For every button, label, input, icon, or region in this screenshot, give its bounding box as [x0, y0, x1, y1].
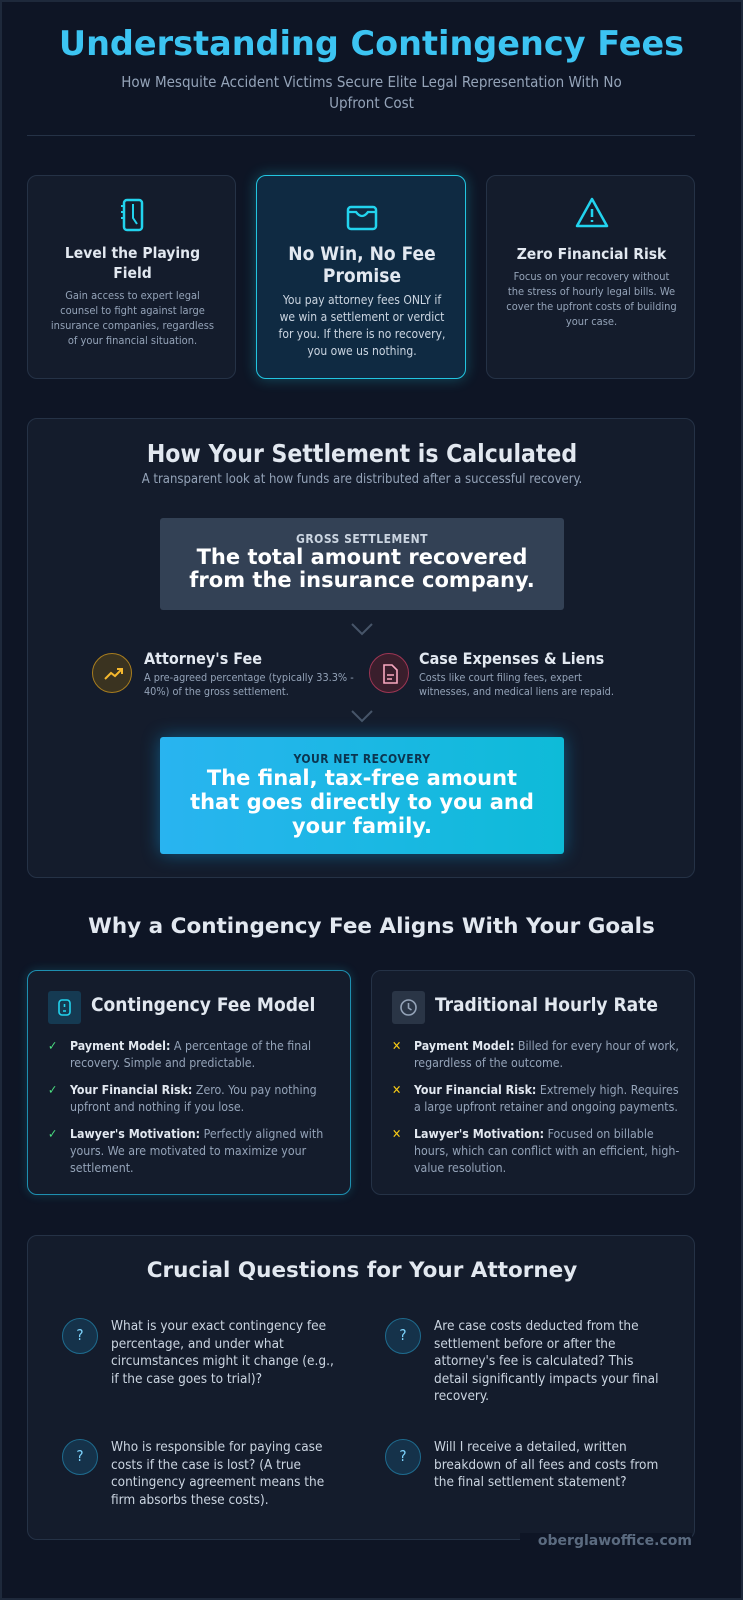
card: no win no fee [256, 175, 466, 379]
net recovery box: that goes directly to you and [190, 790, 534, 814]
card: level the playing field: Gain access to expert legal counsel to fight against large insurance companies, regardless of your financial situation. [51, 289, 214, 347]
item: case expenses: Costs like court filing fees, expert witnesses, and medical liens are repaid. [419, 671, 614, 698]
question 2: Are case costs deducted from the settlement before or after the attorney's fee is calculated? This detail significantly impacts your final recovery. [434, 1318, 658, 1404]
list [48, 1039, 323, 1175]
card: no win no fee: No Win, No Fee [288, 243, 436, 265]
net recovery box: The final, tax-free amount [207, 766, 517, 790]
list: Payment Model: A percentage of the final recovery. Simple and predictable. [70, 1039, 311, 1070]
list: Lawyer's Motivation: Perfectly aligned with yours. We are motivated to maximize your settlement. [70, 1127, 323, 1175]
panel: questions [27, 1235, 695, 1540]
item: case expenses [369, 649, 614, 698]
heading: why: Why a Contingency Fee Aligns With Your Goals [88, 914, 655, 939]
item: attorney fee [92, 649, 354, 698]
card: level the playing field: Level the Playing [65, 244, 200, 262]
gross settlement box: The total amount recovered [197, 545, 527, 569]
panel: contingency model: Contingency Fee Model [91, 994, 315, 1016]
panel: settlement [27, 418, 695, 878]
net recovery box [160, 737, 564, 854]
list: ✕ [392, 1039, 401, 1053]
list [392, 1039, 679, 1175]
icon: file [369, 653, 409, 693]
card: no win no fee: Promise [323, 265, 401, 287]
card: zero financial risk [486, 175, 695, 379]
item: case expenses: Case Expenses & Liens [419, 649, 604, 668]
card: zero financial risk: Focus on your recovery without the stress of hourly legal bills. We cover the upfront costs of building your case. [506, 270, 677, 328]
list: Your Financial Risk: Extremely high. Requires a large upfront retainer and ongoing payments. [414, 1083, 679, 1114]
list: ✓ [48, 1039, 57, 1053]
card: level the playing field: Field [113, 264, 152, 282]
card: level the playing field [27, 175, 236, 379]
panel: hourly rate [371, 970, 695, 1195]
question 4: ? [399, 1447, 407, 1465]
icon: warning [576, 198, 608, 228]
question 3: Who is responsible for paying case costs if the case is lost? (A true contingency agreement means the firm absorbs these costs). [111, 1439, 324, 1508]
icon: document [121, 198, 144, 232]
heading: How Your Settlement is Calculated [147, 439, 577, 468]
list: Your Financial Risk: Zero. You pay nothing upfront and nothing if you lose. [70, 1083, 317, 1114]
list: ✕ [392, 1127, 401, 1141]
list: ✕ [392, 1083, 401, 1097]
question 4: Will I receive a detailed, written breakdown of all fees and costs from the final settlement statement? [434, 1439, 658, 1490]
card: zero financial risk: Zero Financial Risk [517, 245, 666, 263]
gross settlement box: from the insurance company. [189, 568, 535, 592]
question 1: What is your exact contingency fee percentage, and under what circumstances might it change (e.g., if the case goes to trial)? [111, 1318, 334, 1386]
list: ✓ [48, 1127, 57, 1141]
question 1: ? [76, 1326, 84, 1344]
icon: trend [92, 653, 132, 693]
net recovery box: YOUR NET RECOVERY [293, 752, 431, 766]
footer: website: oberglawoffice.com [538, 1533, 692, 1549]
card: no win no fee: You pay attorney fees ONLY if we win a settlement or verdict for you. If there is no recovery, you owe us nothing. [279, 293, 445, 358]
net recovery box: your family. [292, 814, 432, 838]
title: Understanding Contingency Fees [59, 24, 684, 63]
icon [48, 991, 81, 1024]
subtitle: How Mesquite Accident Victims Secure Elite Legal Representation With No [121, 73, 622, 91]
item: attorney fee: Attorney's Fee [144, 649, 262, 668]
subtitle [121, 73, 622, 112]
panel: hourly rate: Traditional Hourly Rate [435, 994, 658, 1016]
item: attorney fee: A pre-agreed percentage (typically 33.3% - 40%) of the gross settlement. [144, 671, 354, 698]
panel: settlement: A transparent look at how funds are distributed after a successful recovery. [142, 472, 582, 487]
panel: contingency model [27, 970, 351, 1195]
gross settlement box: GROSS SETTLEMENT [296, 532, 428, 546]
question 3: ? [76, 1447, 84, 1465]
subtitle: Upfront Cost [329, 94, 414, 112]
list: Payment Model: Billed for every hour of work, regardless of the outcome. [414, 1039, 679, 1070]
arrow [351, 623, 373, 636]
arrow [351, 710, 373, 722]
list: Lawyer's Motivation: Focused on billable hours, which can conflict with an efficient, high-value resolution. [414, 1127, 679, 1175]
gross settlement box [160, 518, 564, 610]
icon: wallet [346, 206, 378, 230]
panel: questions: Crucial Questions for Your Attorney [147, 1258, 577, 1283]
question 2: ? [399, 1326, 407, 1344]
list: ✓ [48, 1083, 57, 1097]
icon: clock [392, 991, 425, 1024]
